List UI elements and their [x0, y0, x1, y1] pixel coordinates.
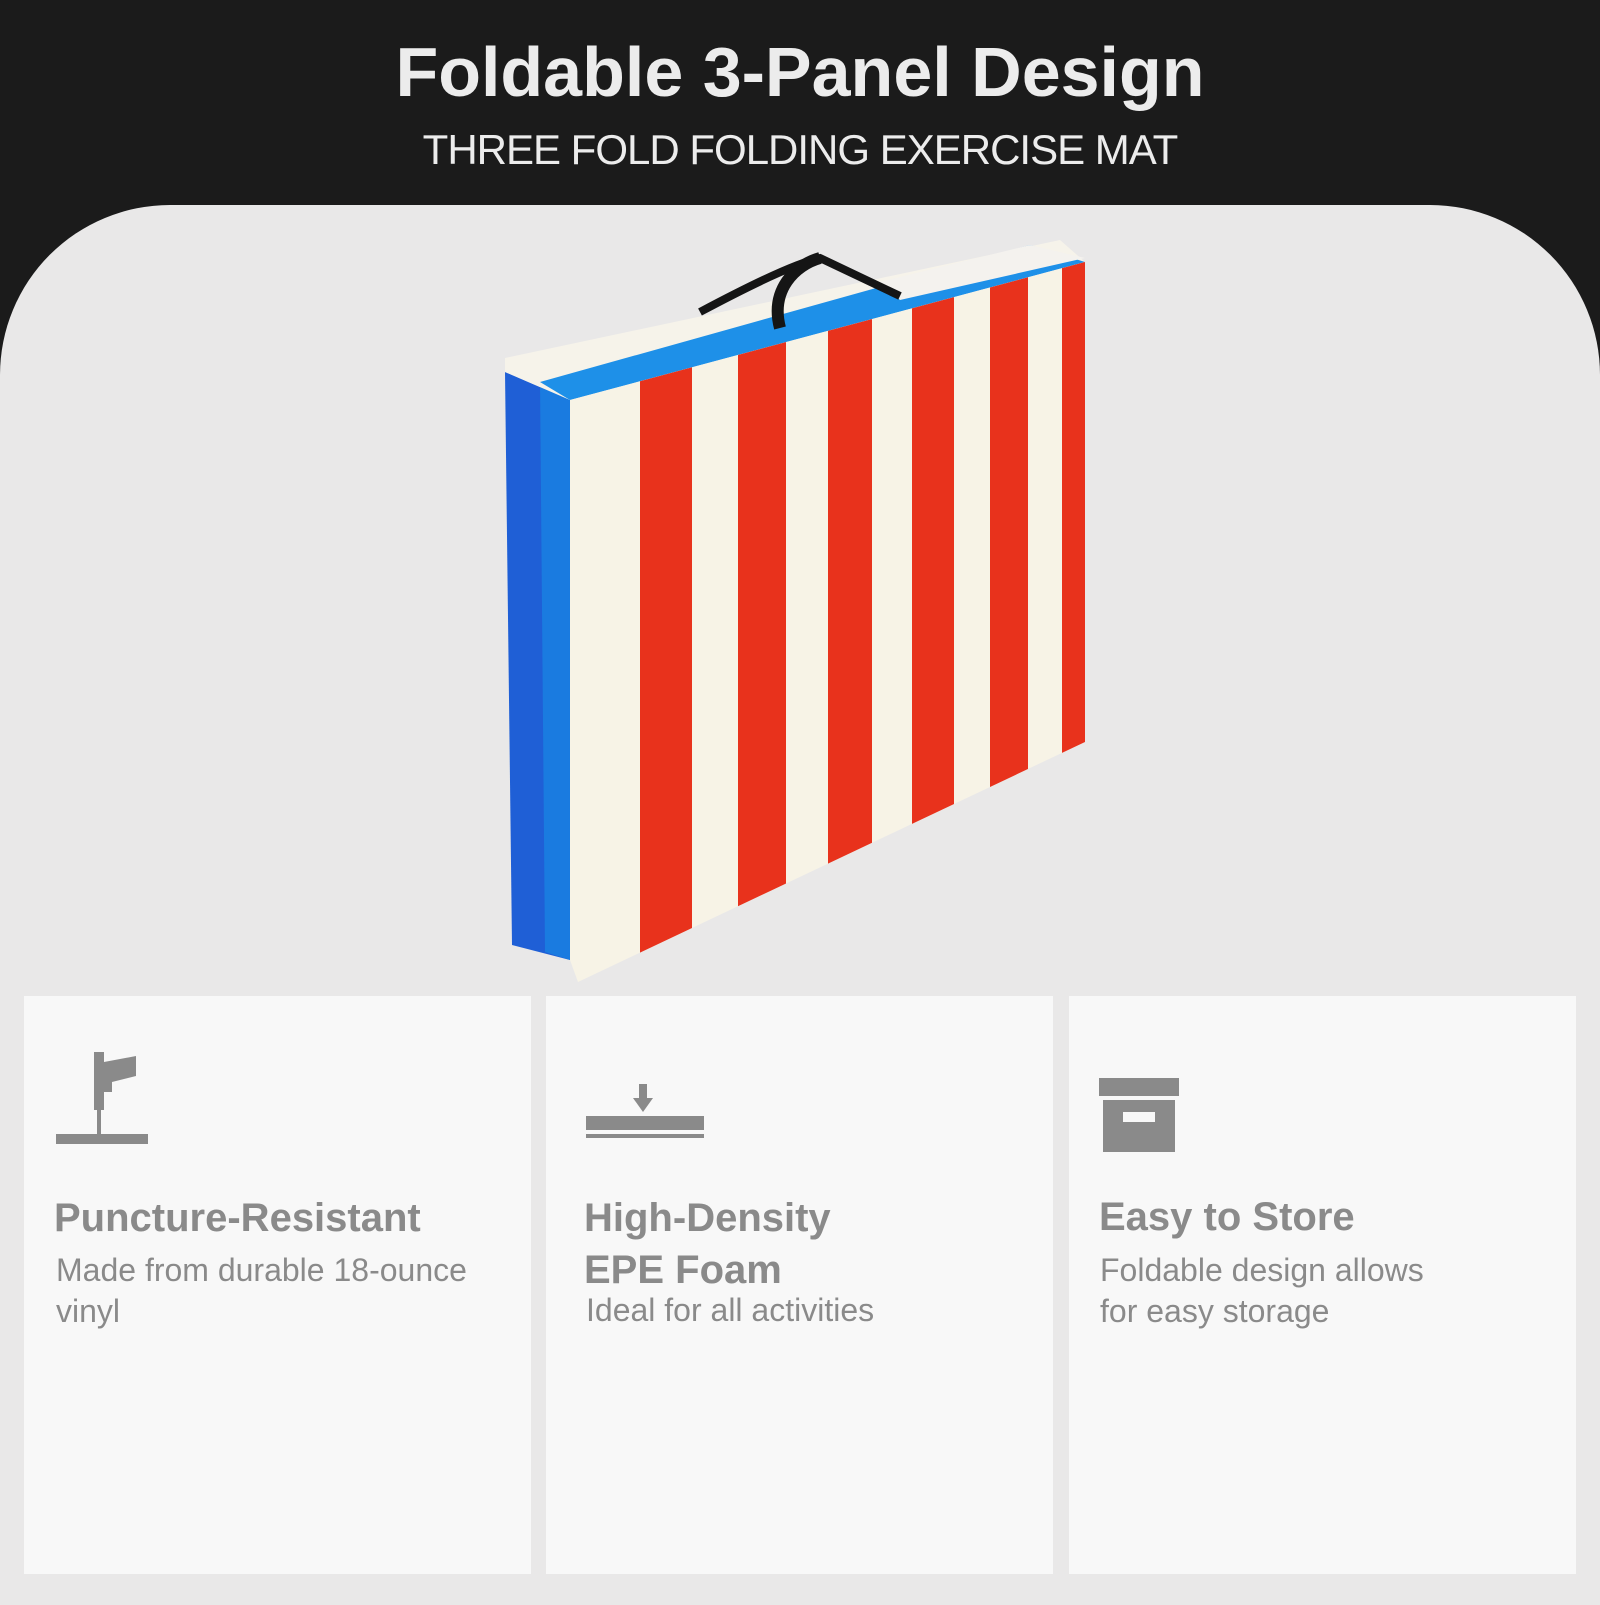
heading: EPE Foam: [584, 1248, 782, 1292]
icon: press on foam: [586, 1084, 704, 1138]
product image: folded mat: [505, 240, 1085, 982]
handle: [700, 258, 900, 312]
description: vinyl: [56, 1293, 120, 1329]
title: Foldable 3-Panel Design: [395, 33, 1205, 111]
card: easy to store: [1069, 996, 1576, 1574]
subtitle: THREE FOLD FOLDING EXERCISE MAT: [423, 126, 1177, 173]
blue side: [505, 372, 570, 960]
heading: [584, 1196, 831, 1292]
description: Ideal for all activities: [586, 1292, 874, 1328]
card: puncture-resistant: [24, 996, 531, 1574]
front face: [570, 262, 1085, 982]
icon: nail gun: [56, 1052, 148, 1144]
heading: Easy to Store: [1099, 1195, 1355, 1239]
heading: High-Density: [584, 1196, 831, 1240]
description: [56, 1252, 467, 1329]
card: high density foam: [546, 996, 1053, 1574]
description: Foldable design allows: [1100, 1252, 1424, 1288]
icon: storage box: [1099, 1078, 1179, 1152]
description: [1100, 1252, 1424, 1329]
top face: [505, 240, 1085, 400]
description: Made from durable 18-ounce: [56, 1252, 467, 1288]
description: for easy storage: [1100, 1293, 1329, 1329]
heading: Puncture-Resistant: [54, 1196, 421, 1240]
